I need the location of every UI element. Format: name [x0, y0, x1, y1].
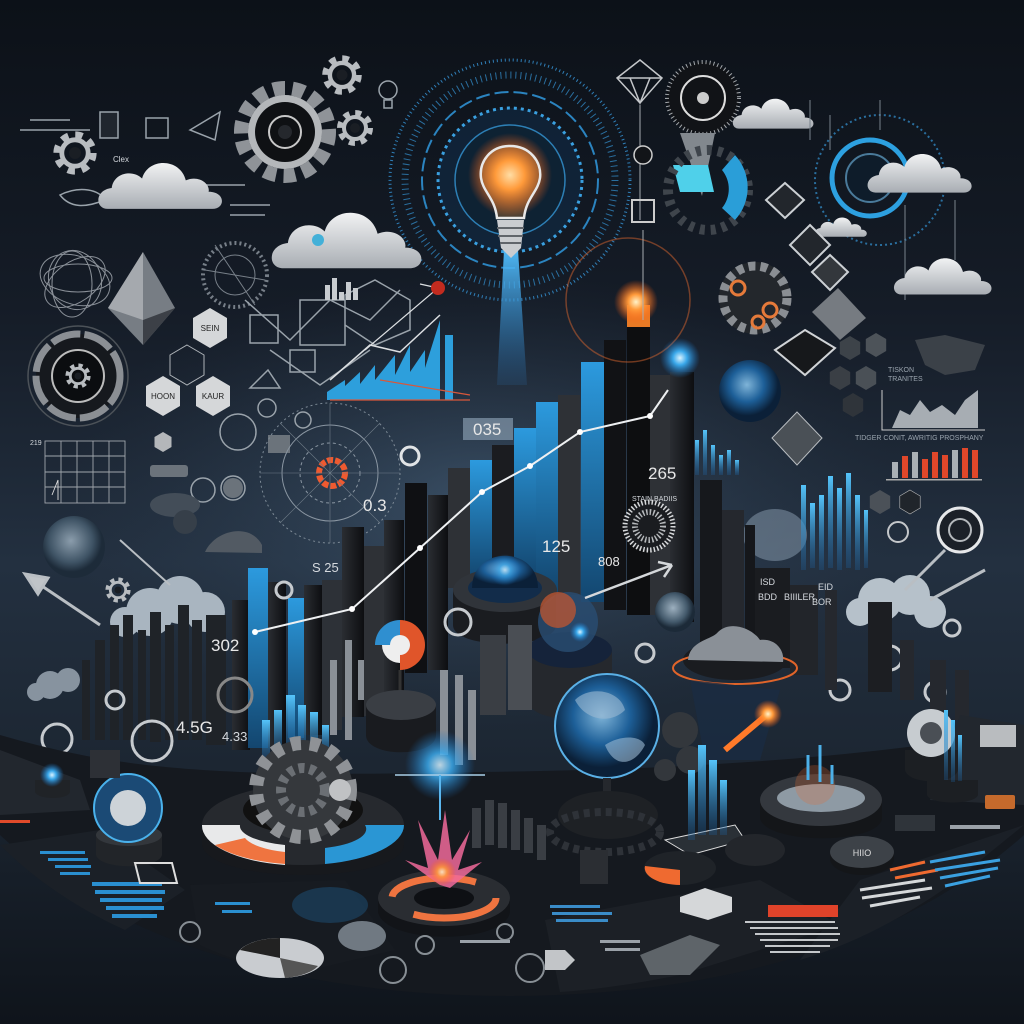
floor panels: [0, 715, 1024, 992]
main bar chart: [232, 305, 694, 750]
world map text: [888, 335, 985, 383]
grid chart: 219: [30, 440, 42, 447]
bulb glow on top of tallest bar: [614, 280, 658, 324]
small blue pedestal left: [35, 763, 70, 798]
spark platform: [378, 810, 510, 937]
nebula pedestal: [528, 592, 612, 719]
cloud left: [98, 163, 222, 209]
large gear: [241, 88, 329, 176]
central haze: [60, 270, 900, 730]
blue holographic bars: [644, 745, 785, 885]
dotted radial chart centre-left: [260, 403, 419, 543]
right skyline labels: BDD: [758, 592, 778, 602]
blue small bars: [262, 695, 329, 760]
gear sphere upper right: [719, 262, 791, 334]
right skyline labels: EID: [818, 582, 834, 592]
diamond icon: [108, 252, 175, 345]
mini chart in cloud: [312, 234, 358, 300]
small puck: [830, 836, 894, 875]
hexagon cluster right: [772, 288, 886, 465]
small blue bars centre right: [695, 430, 739, 475]
bar chart labels: 302: [211, 636, 239, 655]
pie chart bottom: [236, 938, 324, 978]
arrows left: [25, 540, 170, 625]
bar chart labels: 265: [648, 464, 676, 483]
orange bars: [886, 448, 982, 480]
donut on pedestal: [366, 620, 436, 752]
white list panels centre: [460, 905, 720, 975]
ring dial left: [28, 326, 128, 426]
left orb pedestal: [94, 774, 162, 866]
small gears top left: [57, 58, 370, 600]
top right: diamond, dial, pie chart: [617, 60, 748, 320]
small ring icons: [42, 582, 960, 761]
bottom ring icons: [180, 922, 544, 983]
label: Clex: Clex: [113, 155, 129, 164]
right skyline labels: ISD: [760, 577, 776, 587]
large blue globe: [550, 674, 660, 852]
orange radial ring behind bars: [566, 238, 690, 362]
floor platform: [0, 730, 1024, 996]
cloud pedestal with comet: [673, 626, 797, 760]
disco sphere: [624, 501, 674, 551]
world map text: TRANITES: [888, 376, 923, 383]
right skyline: [700, 480, 969, 720]
network icons: [191, 280, 410, 502]
blue star flare: [660, 338, 700, 378]
pedestal with blue bars: [927, 710, 978, 802]
blue ring right: [810, 100, 955, 300]
dark cloud centre left: [205, 531, 262, 553]
cloud lower right: [894, 258, 992, 294]
fog right: [846, 575, 946, 628]
blue list panels left: [0, 820, 252, 918]
right diamonds: [766, 183, 848, 290]
small puck: HIIO: [853, 848, 871, 858]
pedestal with portrait orb: [905, 709, 958, 781]
bar chart labels: 808: [598, 554, 620, 569]
left skyline: [82, 605, 226, 745]
right skyline labels: [758, 577, 834, 607]
white trend line: [252, 390, 668, 635]
top-left icon cluster: [20, 81, 397, 215]
bar chart labels: 4.33: [222, 729, 247, 744]
radial sphere: [203, 243, 267, 307]
hexagon labels: SEIN: [201, 324, 220, 333]
glass orb bottom: [338, 921, 386, 951]
small objects left: [150, 435, 290, 534]
white card left: [135, 863, 177, 883]
right skyline labels: BOR: [812, 597, 832, 607]
bar chart labels: S 25: [312, 560, 339, 575]
bar chart labels: 125: [542, 537, 570, 556]
hexagon labels: KAUR: [202, 392, 224, 401]
right ring and hexagons: [870, 490, 985, 600]
white boxes: [90, 725, 1016, 920]
orange list panel: [860, 862, 938, 906]
cloud top right: [733, 99, 813, 129]
bar chart labels: 0.3: [363, 496, 387, 515]
horizon cloud far left: [27, 668, 80, 701]
bar chart labels: STAIN BADIIS: [632, 496, 677, 503]
bar chart labels: 035: [473, 420, 501, 439]
fog left: [110, 576, 225, 637]
striped table right: [745, 905, 840, 952]
grey area chart: [882, 390, 985, 430]
glowing particle orb centre: [395, 730, 485, 820]
nebula dots: [292, 887, 368, 923]
chart caption: TIDGER CONIT, AWRITIG PROSPHANY: [855, 435, 984, 442]
light haze behind bars: [743, 509, 807, 561]
gear sphere platform: [202, 740, 404, 875]
hexagon labels: HOON: [151, 392, 175, 401]
center grey columns: [330, 625, 532, 765]
blue area chart: [327, 281, 470, 400]
blue globe orb: [719, 360, 781, 422]
world map text: TISKON: [888, 367, 914, 374]
bar chart labels: 4.5G: [176, 718, 213, 737]
gears pile: [654, 712, 704, 781]
right skyline labels: BIIILER: [784, 592, 816, 602]
bar chart labels: [176, 418, 677, 744]
blue bars right: [801, 473, 868, 570]
right floor icons: [895, 795, 1015, 831]
hexagon labels: [146, 308, 230, 452]
arrow up right: [585, 562, 672, 598]
cloud centre: [272, 213, 421, 268]
cloud small: [815, 217, 867, 237]
left abstract scribble sphere: [33, 243, 117, 318]
lightbulb with radial rings: [390, 60, 630, 385]
disc platform right: [760, 745, 882, 838]
glass sphere left: [43, 516, 105, 578]
cloud right: [868, 154, 972, 193]
dark moon sphere: [655, 592, 695, 632]
columns beside burst: [472, 800, 546, 860]
grid chart: [30, 440, 125, 503]
blue list panel right: [930, 852, 1000, 886]
blue dome pedestal: [453, 554, 557, 644]
